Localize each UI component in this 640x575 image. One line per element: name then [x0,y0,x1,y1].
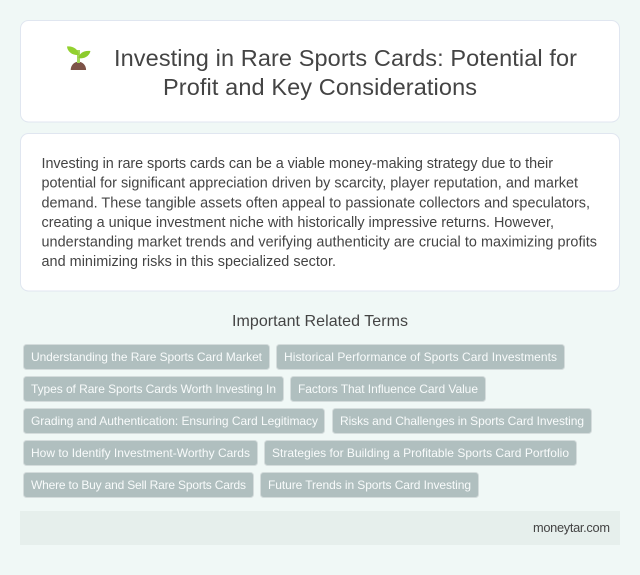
tag: Strategies for Building a Profitable Sports Card Portfolio [272,446,569,460]
icon: seedling [67,46,90,70]
tag: Grading and Authentication: Ensuring Card Legitimacy [31,414,318,428]
tag: Types of Rare Sports Cards Worth Investing In [31,382,276,396]
tag [264,440,576,466]
tag [24,408,324,434]
intro paragraph: and minimizing risks in this specialized sector. [42,254,336,270]
tag [24,472,254,498]
title [114,45,577,100]
tag: Risks and Challenges in Sports Card Investing [340,414,584,428]
tag [24,440,258,466]
tag: Where to Buy and Sell Rare Sports Cards [31,478,246,492]
tag [24,344,270,370]
tag [290,376,486,402]
footer bar [20,511,620,545]
tag: Understanding the Rare Sports Card Market [31,350,263,364]
heading: important related terms: Important Related Terms [232,313,408,330]
panel: intro text card [20,134,620,291]
intro paragraph: creating a unique investment niche with historically impressive returns. However, [42,215,554,231]
tag [260,472,478,498]
title: Investing in Rare Sports Cards: Potential for [114,45,577,71]
tag [24,376,284,402]
tag [276,344,564,370]
intro paragraph: demand. These tangible assets often appeal to passionate collectors and speculators, [42,196,590,212]
tag [332,408,592,434]
title: Profit and Key Considerations [163,74,477,100]
tag list [24,344,592,498]
intro paragraph [42,156,597,270]
panel: title card [20,20,620,122]
tag: Future Trends in Sports Card Investing [268,478,471,492]
tag: Historical Performance of Sports Card Investments [284,350,557,364]
tag: How to Identify Investment-Worthy Cards [31,446,250,460]
footer source text: moneytar.com [533,520,610,535]
tag: Factors That Influence Card Value [298,382,478,396]
intro paragraph: Investing in rare sports cards can be a viable money-making strategy due to their [42,156,553,172]
intro paragraph: potential for significant appreciation driven by scarcity, player reputation, and market [42,176,578,192]
intro paragraph: understanding market trends and verifying authenticity are crucial to maximizing profits [42,234,597,250]
